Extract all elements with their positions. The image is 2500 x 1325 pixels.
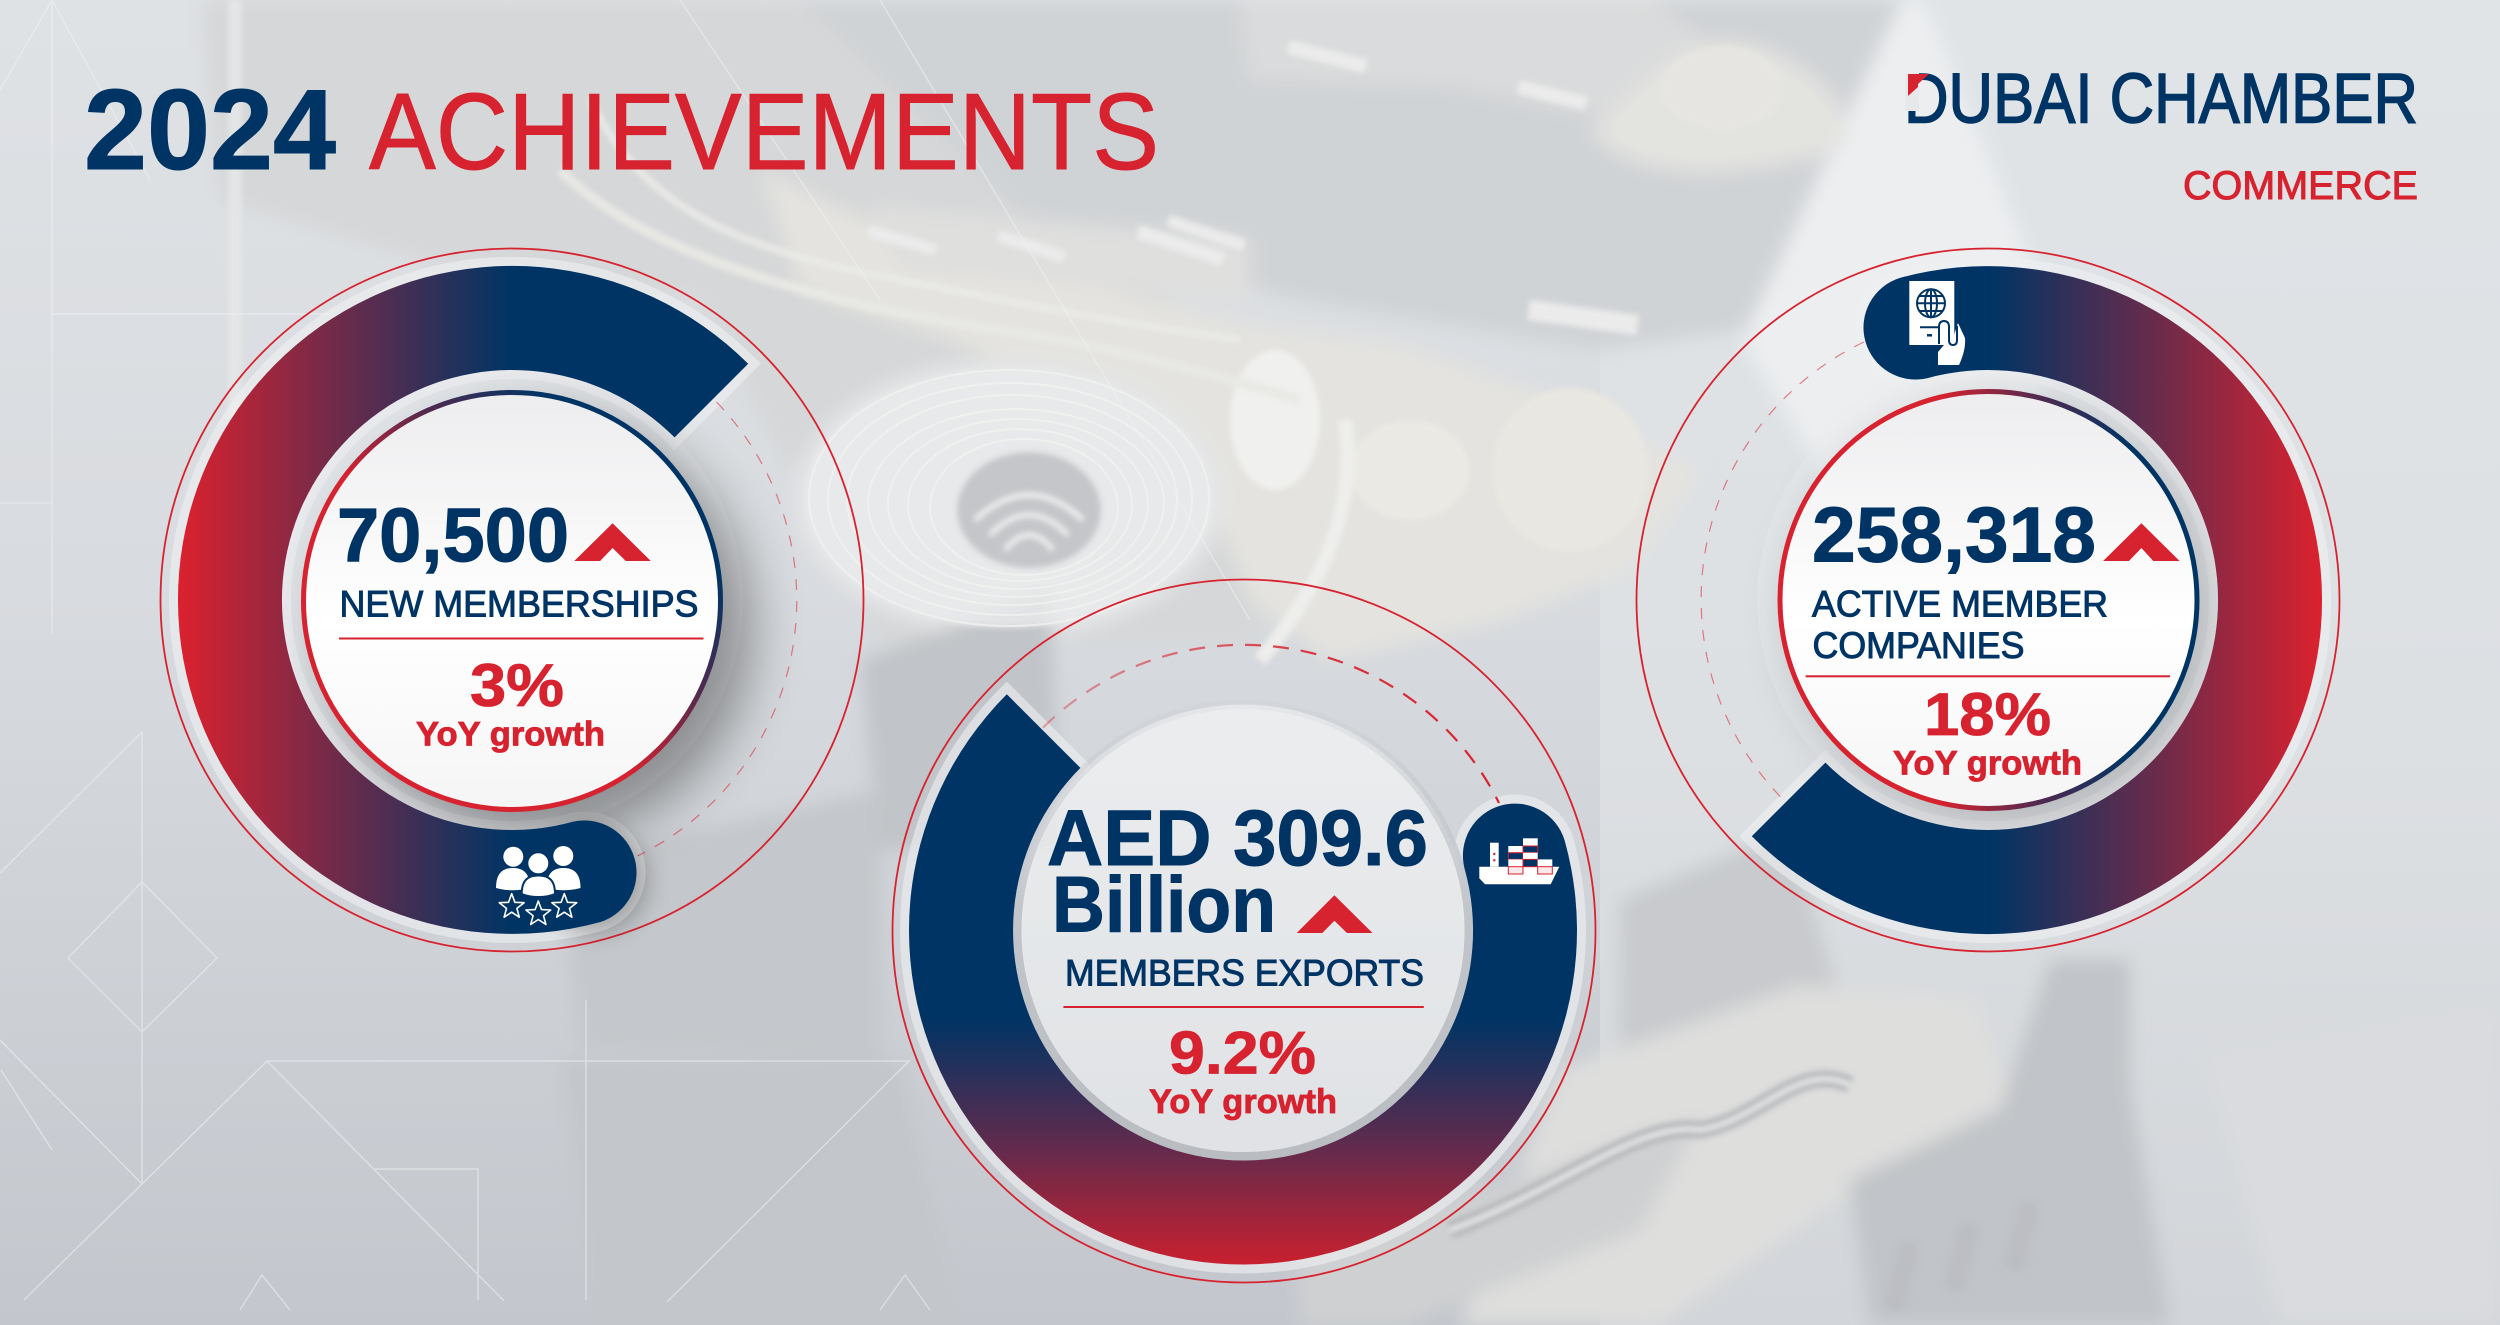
icon: up arrow bbox=[574, 523, 651, 561]
panel: new memberships bbox=[160, 248, 864, 952]
title bbox=[84, 67, 1159, 194]
growth caption: YoY growth bbox=[1149, 1083, 1337, 1121]
icon: container ship bbox=[1479, 838, 1559, 884]
value: AED 309.6 Billion: Billion bbox=[1052, 860, 1276, 948]
inner white disc bbox=[1780, 392, 2197, 808]
inner white disc bbox=[304, 392, 720, 810]
title: 2024 bbox=[84, 67, 336, 194]
growth caption: YoY growth bbox=[416, 716, 605, 754]
growth percentage: 3% bbox=[470, 652, 564, 719]
icon: passport in hand bbox=[1909, 281, 1965, 365]
title: ACHIEVEMENTS bbox=[369, 71, 1159, 193]
value: AED 309.6 Billion: AED 309.6 bbox=[1047, 793, 1428, 882]
label: MEMBERS EXPORTS bbox=[1065, 952, 1424, 994]
growth percentage: 18% bbox=[1924, 681, 2051, 748]
icon: up arrow bbox=[2103, 523, 2180, 561]
label: COMPANIES bbox=[1812, 625, 2024, 666]
logo: Dubai Chamber Commerce: DUBAI CHAMBER bbox=[1904, 58, 2418, 138]
growth caption: YoY growth bbox=[1893, 744, 2082, 782]
value: 70,500: 70,500 bbox=[337, 494, 569, 578]
icon: up arrow bbox=[1297, 895, 1372, 933]
donut ring bbox=[178, 266, 748, 934]
growth percentage: 9.2% bbox=[1169, 1020, 1316, 1086]
panel: members exports bbox=[892, 580, 1596, 1282]
donut ring bbox=[909, 694, 1577, 1264]
icon: members with stars bbox=[496, 846, 580, 924]
donut ring bbox=[1752, 266, 2322, 934]
label: NEW MEMBERSHIPS bbox=[340, 584, 698, 624]
logo: Dubai Chamber Commerce: COMMERCE bbox=[2183, 164, 2418, 208]
value: 258,318: 258,318 bbox=[1812, 490, 2096, 578]
label: ACTIVE MEMBER bbox=[1812, 584, 2108, 624]
logo: Dubai Chamber Commerce bbox=[1904, 58, 2418, 208]
panel: active member companies bbox=[1636, 248, 2340, 952]
